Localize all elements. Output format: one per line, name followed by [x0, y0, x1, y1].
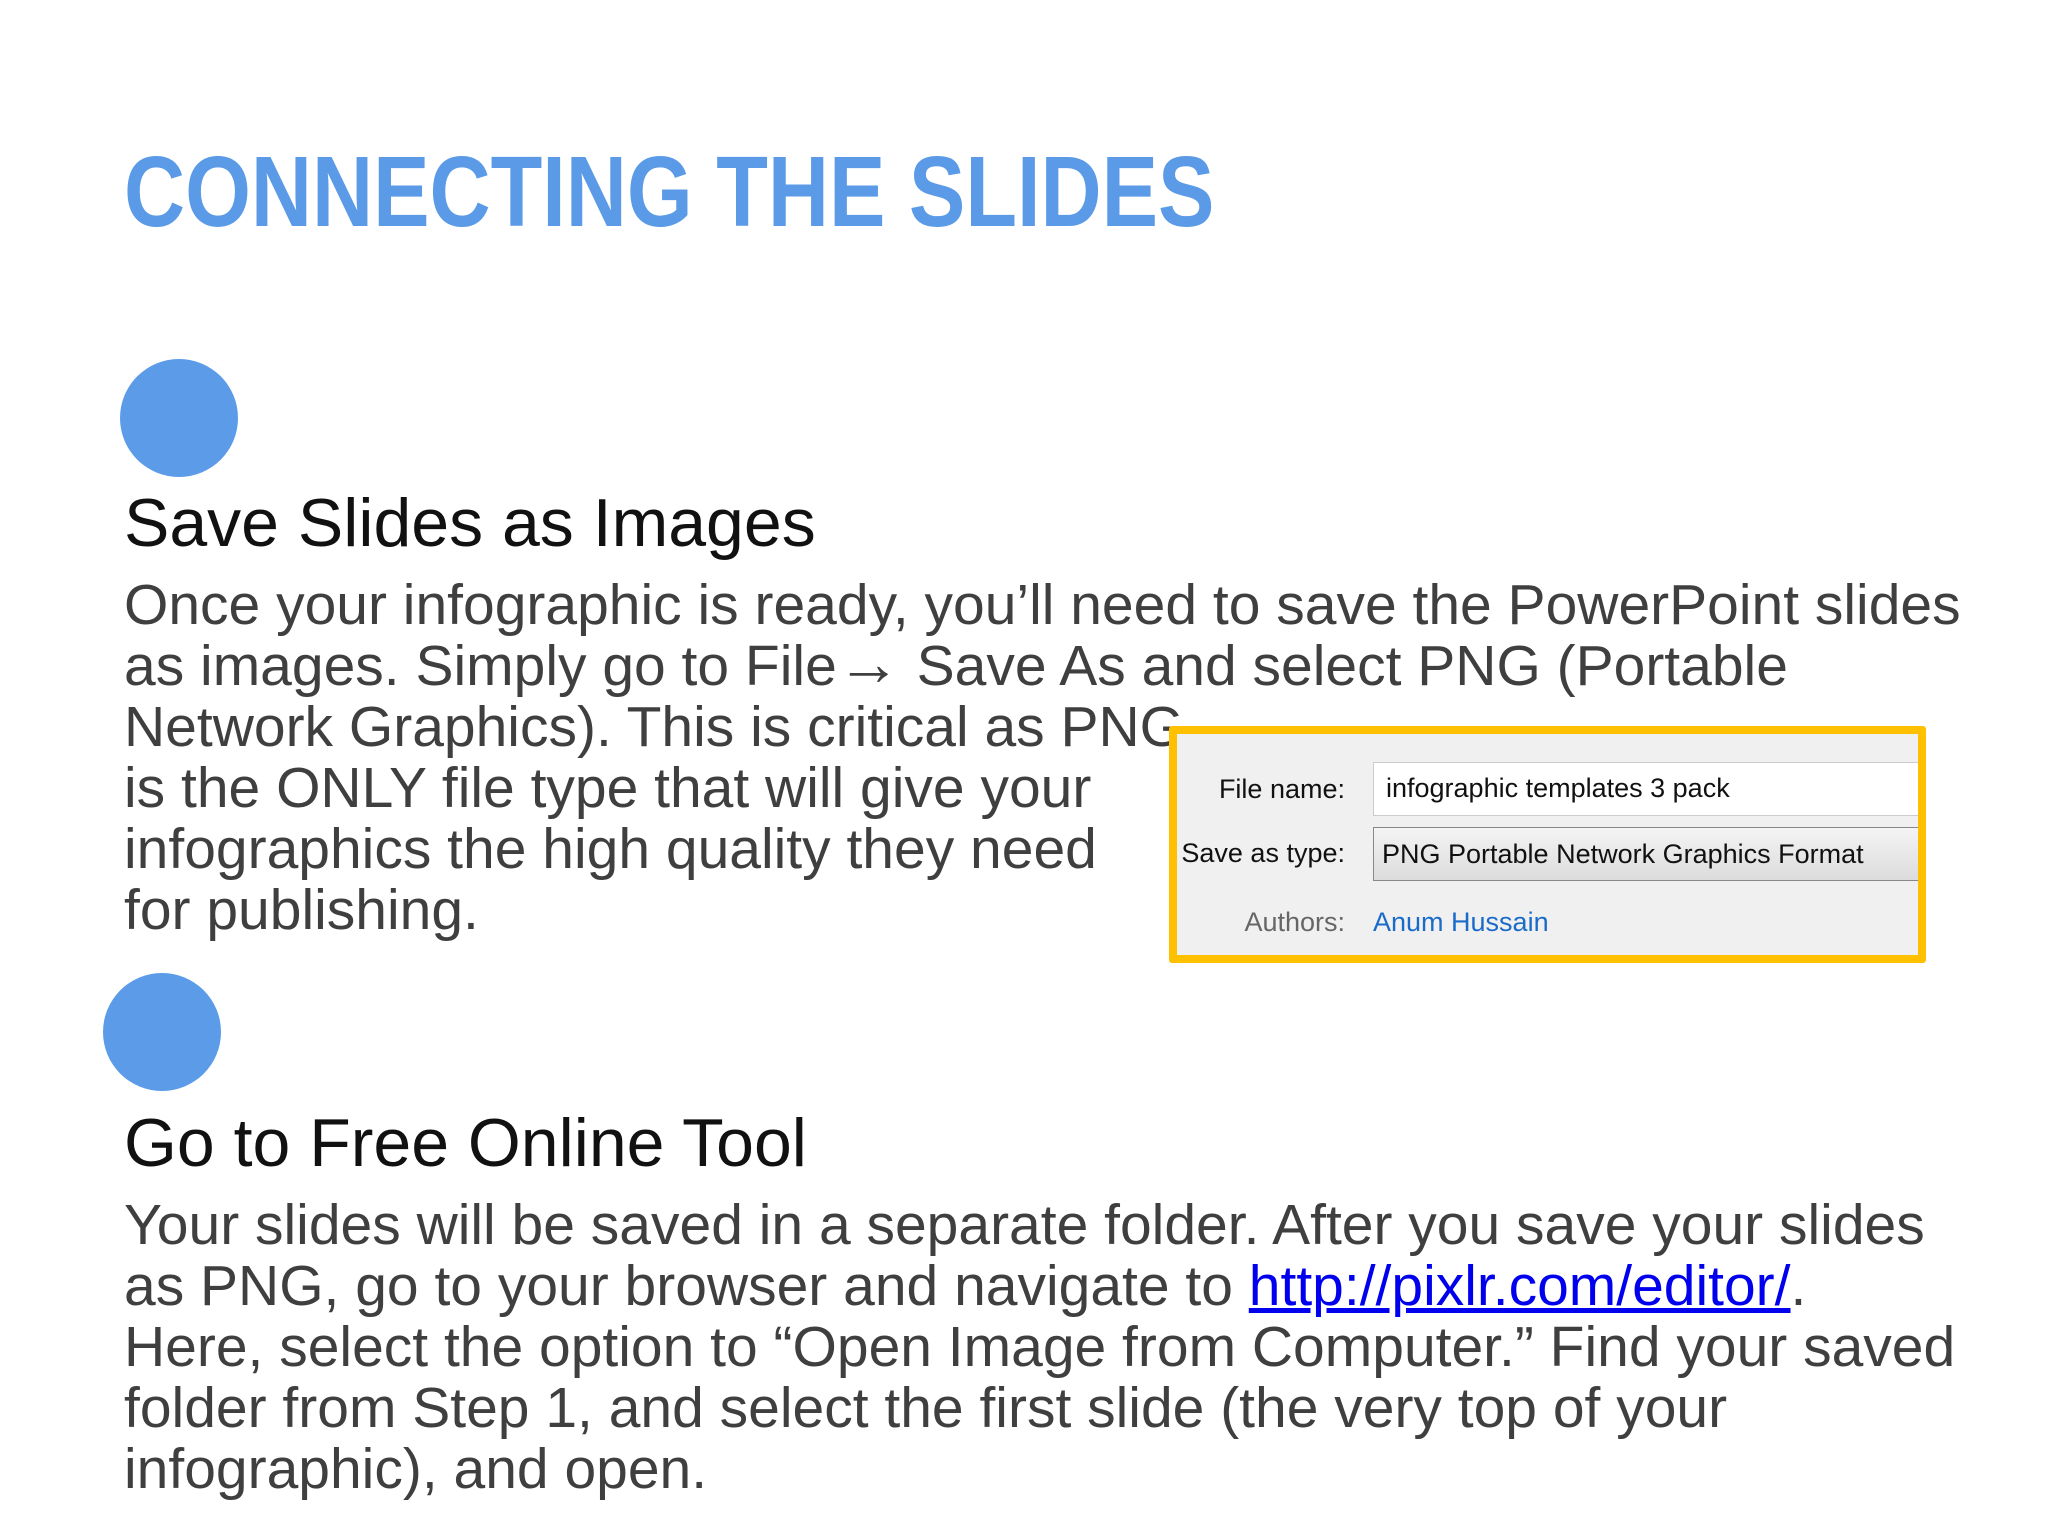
text block: step 2: Here, select the option to “Open Image from Computer.” Find your saved	[124, 1315, 1955, 1379]
icon: circle step 2	[103, 973, 221, 1091]
text block: step 1: for publishing.	[124, 878, 479, 942]
icon: circle step 1	[120, 359, 238, 477]
field: save as type: PNG Portable Network Graphics Format	[1382, 839, 1864, 869]
text block: step 1: Network Graphics). This is critical as PNG	[124, 695, 1184, 759]
screenshot: save dialog	[1169, 726, 1926, 963]
field: file name	[1373, 762, 1931, 816]
text block: step 1	[124, 573, 1961, 942]
text block: step 2: infographic), and open.	[124, 1437, 707, 1501]
text block: step 2: folder from Step 1, and select the first slide (the very top of your	[124, 1376, 1727, 1440]
label: save as type: Save as type:	[1181, 838, 1345, 868]
label: authors: Authors:	[1244, 907, 1345, 937]
text block: step 2: as PNG, go to your browser and navigate to http://pixlr.com/editor/.	[124, 1254, 1806, 1318]
heading: go to free online tool: Go to Free Online Tool	[124, 1105, 807, 1181]
text block: step 1: is the ONLY file type that will give your	[124, 756, 1091, 820]
text block: step 2: Your slides will be saved in a separate folder. After you save your slides	[124, 1193, 1925, 1257]
value: author name: Anum Hussain	[1373, 907, 1549, 937]
heading: save slides as images: Save Slides as Images	[124, 485, 816, 561]
text block: step 2	[124, 1193, 1955, 1501]
label: file name: File name:	[1219, 774, 1345, 804]
field: save as type	[1373, 827, 1927, 881]
title: CONNECTING THE SLIDES	[124, 136, 1214, 248]
field: file name: infographic templates 3 pack	[1386, 773, 1730, 803]
text block: step 1: as images. Simply go to File→ Save As and select PNG (Portable	[124, 627, 1788, 699]
text block: step 1: infographics the high quality they need	[124, 817, 1097, 881]
text block: step 1: Once your infographic is ready, you’ll need to save the PowerPoint slides	[124, 573, 1961, 637]
